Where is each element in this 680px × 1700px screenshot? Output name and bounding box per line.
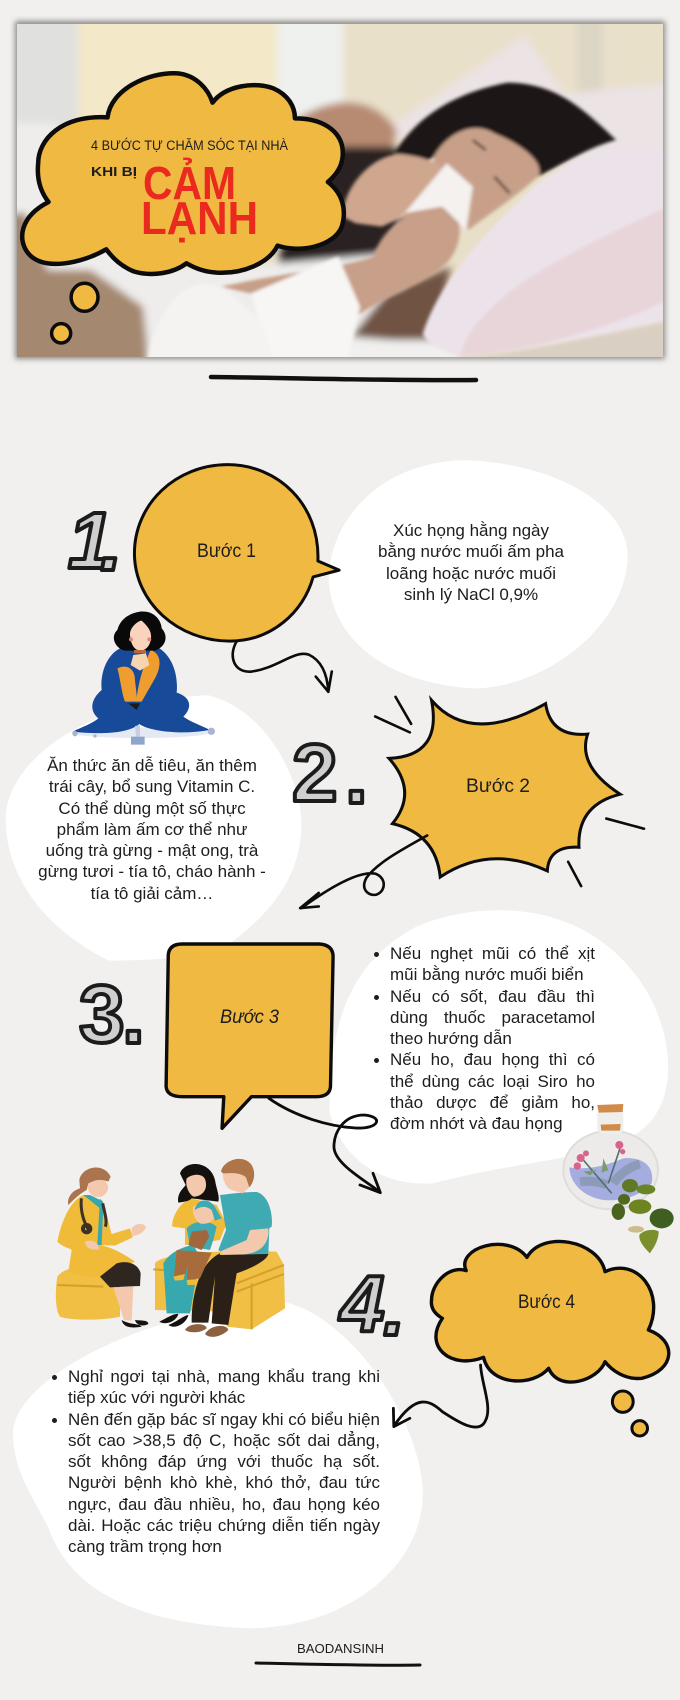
title text: 4 BƯỚC TỰ CHĂM SÓC TẠI NHÀ <box>91 138 288 153</box>
burst accent lines <box>375 697 644 886</box>
text: step 4 instructions: Người bệnh khò khè, khó thở, đau tức <box>68 1473 380 1492</box>
text: step 3 instructions: đờm nhớt và đau họng <box>390 1114 563 1133</box>
text: step 2 instructions: gừng tươi - tía tô, cháo hành - <box>38 862 266 881</box>
text: step 3 instructions: thể dùng các loại Siro ho <box>390 1072 595 1091</box>
footer credit: BAODANSINH <box>297 1641 384 1656</box>
text: step 2 instructions: tía tô giải cảm… <box>91 884 213 903</box>
bottom underline <box>256 1663 420 1665</box>
top underline <box>211 377 476 380</box>
illustration: doctor and family on yellow poufs <box>56 1159 285 1337</box>
step 2 burst bubble <box>375 697 644 886</box>
text: step 2 instructions <box>38 756 266 903</box>
text: step 3 instructions <box>374 944 595 1133</box>
step 2 label: Bước 2 <box>466 776 530 797</box>
arrow: step 4 to step 4 text <box>393 1365 488 1427</box>
text: step 4 instructions <box>52 1367 380 1556</box>
title text: CẢM <box>143 157 236 209</box>
thought bubble dots <box>52 283 98 343</box>
text: step 4 instructions: sốt cao >38,5 độ C, hoặc sốt dai dẳng, <box>68 1431 380 1450</box>
title text: KHI BỊ <box>91 164 137 179</box>
hero photo: woman with a cold blowing her nose in bed <box>0 0 680 370</box>
text: step 3 instructions: Nếu ho, đau họng thì có <box>390 1050 595 1069</box>
thought bubble dots <box>612 1391 648 1436</box>
number 2: 2 <box>292 728 338 819</box>
text: step 4 instructions: sốt không đáp ứng với thuốc hạ sốt. <box>68 1452 380 1471</box>
title text <box>91 138 288 244</box>
text: step 4 instructions: Nên đến gặp bác sĩ ngay khi có biểu hiện <box>68 1410 380 1429</box>
text: step 2 instructions: trái cây, bổ sung Vitamin C. <box>49 777 255 796</box>
step 1 label: Bước 1 <box>197 541 256 562</box>
panel: step 4 text blob <box>13 1302 423 1628</box>
number 3: 3 <box>79 969 125 1060</box>
step 3 label: Bước 3 <box>220 1007 279 1028</box>
number 1: 1 <box>68 496 112 585</box>
text: step 3 instructions: dùng thuốc paracetamol <box>390 1008 595 1027</box>
text: step 3 instructions: theo hướng dẫn <box>390 1029 512 1048</box>
step 3 speech bubble <box>166 944 333 1128</box>
number 2: . <box>345 730 368 821</box>
text: step 3 instructions: Nếu nghẹt mũi có thể xịt <box>390 944 595 963</box>
title cloud bubble <box>22 73 344 343</box>
text: step 2 instructions: Có thể dùng một số thực <box>58 799 246 818</box>
text: step 4 instructions: Nghỉ ngơi tại nhà, mang khẩu trang khi <box>68 1367 380 1386</box>
step 1 speech bubble <box>134 465 339 641</box>
text: step 1 instructions <box>378 521 564 604</box>
text: step 4 instructions: dài. Hoặc các triệu chứng diễn tiến ngày <box>68 1516 380 1535</box>
text: step 2 instructions: Ăn thức ăn dễ tiêu, ăn thêm <box>47 756 257 775</box>
arrow: step 1 to step 2 <box>233 641 332 692</box>
text: step 2 instructions: phẩm làm ấm cơ thể như <box>57 820 247 839</box>
text: step 2 instructions: uống trà gừng - mật ong, trà <box>46 841 258 860</box>
text: step 4 instructions: tiếp xúc với người khác <box>68 1388 245 1407</box>
text: step 3 instructions: Nếu có sốt, đau đầu thì <box>390 987 595 1006</box>
title text: LẠNH <box>141 192 258 244</box>
text: step 4 instructions: càng trầm trọng hơn <box>68 1537 222 1556</box>
panel: step 1 text blob <box>329 460 628 688</box>
text: step 1 instructions: sinh lý NaCl 0,9% <box>404 585 538 604</box>
arrow: step 3 to step 3 text <box>269 1098 380 1193</box>
panel: step 2 text blob <box>6 695 302 961</box>
text: step 3 instructions: thảo dược để giảm ho, <box>390 1093 595 1112</box>
text: step 3 instructions: mũi bằng nước muối biển <box>390 965 584 984</box>
number 4: 4 <box>338 1259 384 1348</box>
text: step 1 instructions: bằng nước muối ấm pha <box>378 542 564 561</box>
number 3: . <box>122 970 145 1061</box>
panel: step 3 text blob <box>330 910 668 1184</box>
step 4 cloud bubble <box>431 1241 669 1436</box>
arrow: step 2 to step 2 text <box>300 835 427 908</box>
illustration: woman wrapped in blue blanket <box>72 612 215 745</box>
number 1: . <box>100 498 122 587</box>
text: step 4 instructions: ngực, đau đầu nhiều, ho, đau họng kéo <box>68 1495 380 1514</box>
illustration: herbal bottle <box>563 1104 674 1253</box>
text: step 1 instructions: Xúc họng hằng ngày <box>393 521 549 540</box>
text: step 1 instructions: loãng hoặc nước muối <box>386 564 556 583</box>
step 4 label: Bước 4 <box>518 1292 575 1313</box>
number 4: . <box>383 1263 405 1352</box>
